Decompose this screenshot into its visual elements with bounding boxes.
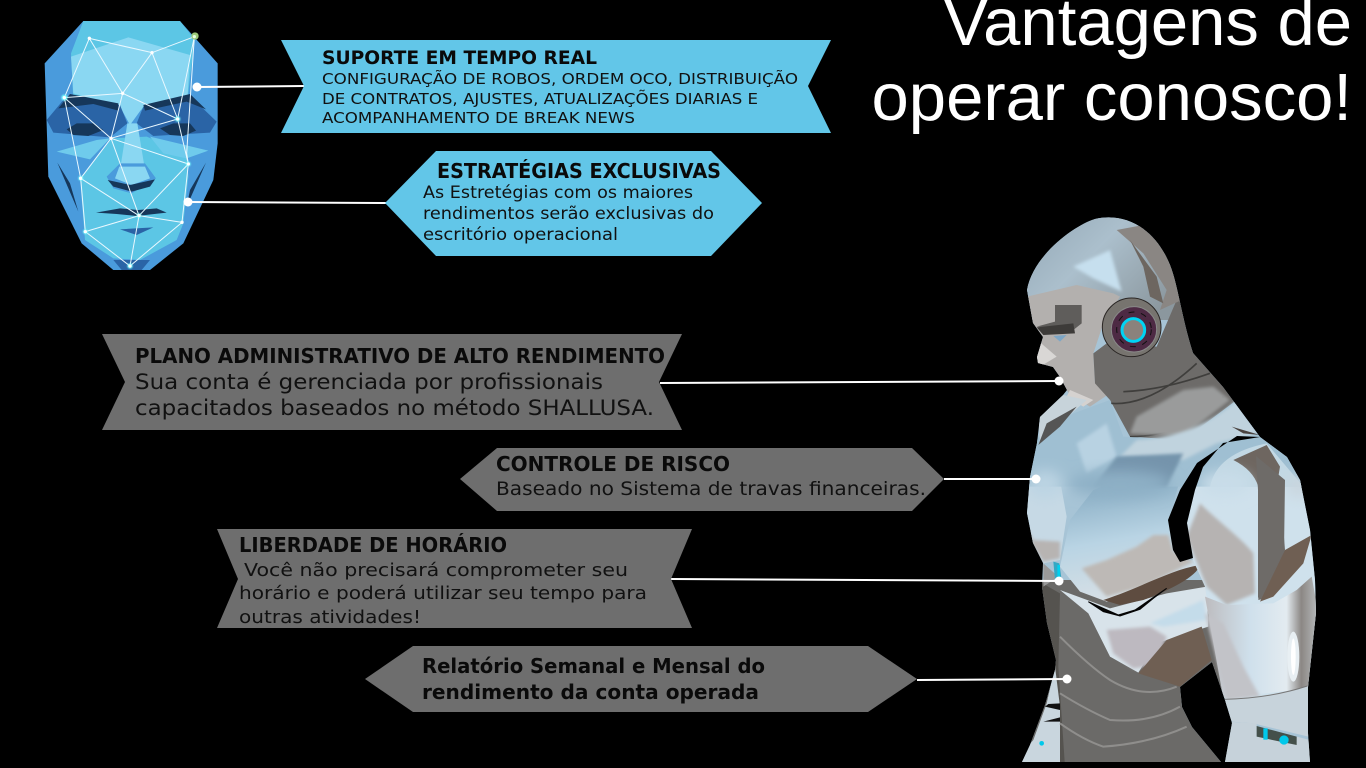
heading: plano: PLANO ADMINISTRATIVO DE ALTO RENDIMENTO bbox=[135, 344, 665, 368]
text: estrategias details bbox=[423, 183, 714, 244]
panel: liberdade de horario bbox=[217, 529, 692, 628]
panel: relatorio semanal e mensal bbox=[365, 646, 917, 712]
text: controle details: Baseado no Sistema de travas financeiras. bbox=[496, 478, 926, 500]
text: liberdade details bbox=[239, 560, 647, 628]
text: suporte details bbox=[322, 69, 798, 127]
text: plano details: Sua conta é gerenciada por profissionais bbox=[135, 370, 603, 394]
text: relatorio: rendimento da conta operada bbox=[422, 680, 759, 704]
text: relatorio bbox=[422, 654, 765, 704]
text: relatorio: Relatório Semanal e Mensal do bbox=[422, 654, 765, 678]
robot shoulder stripe bbox=[1258, 474, 1285, 598]
robot head, neck and shoulders bbox=[1027, 217, 1302, 487]
text: liberdade details: horário e poderá utilizar seu tempo para bbox=[239, 583, 647, 604]
connector lines with dots bbox=[184, 82, 1072, 684]
text: estrategias details: As Estretégias com os maiores bbox=[423, 183, 693, 202]
heading: controle: CONTROLE DE RISCO bbox=[496, 452, 730, 476]
heading: estrategias: ESTRATÉGIAS EXCLUSIVAS bbox=[437, 159, 721, 183]
heading: suporte: SUPORTE EM TEMPO REAL bbox=[322, 47, 597, 69]
title bbox=[872, 0, 1352, 135]
panel: estrategias exclusivas bbox=[385, 151, 762, 256]
robot torso and arm bbox=[1010, 480, 1320, 767]
panel: plano administrativo bbox=[102, 334, 682, 430]
heading: liberdade: LIBERDADE DE HORÁRIO bbox=[239, 533, 507, 557]
robot black arm slit bbox=[1168, 436, 1260, 562]
text: liberdade details: Você não precisará comprometer seu bbox=[244, 560, 628, 581]
panel: suporte em tempo real bbox=[281, 40, 831, 133]
robot seam shading bbox=[1027, 470, 1310, 498]
text: suporte details: CONFIGURAÇÃO DE ROBOS, ORDEM OCO, DISTRIBUIÇÃO bbox=[322, 69, 798, 88]
text: suporte details: ACOMPANHAMENTO DE BREAK NEWS bbox=[322, 109, 635, 127]
illustration: blue low-poly face with mesh bbox=[45, 21, 218, 270]
text: suporte details: DE CONTRATOS, AJUSTES, ATUALIZAÇÕES DIARIAS E bbox=[322, 89, 758, 108]
text: liberdade details: outras atividades! bbox=[239, 607, 421, 628]
text: estrategias details: escritório operacional bbox=[423, 225, 618, 244]
text: plano details: capacitados baseados no método SHALLUSA. bbox=[135, 396, 654, 420]
panel: controle de risco bbox=[460, 448, 944, 511]
illustration: chrome robot in profile bbox=[1022, 217, 1316, 762]
title: operar conosco! bbox=[872, 60, 1352, 135]
text: estrategias details: rendimentos serão exclusivas do bbox=[423, 204, 714, 223]
text: plano details bbox=[135, 370, 654, 420]
